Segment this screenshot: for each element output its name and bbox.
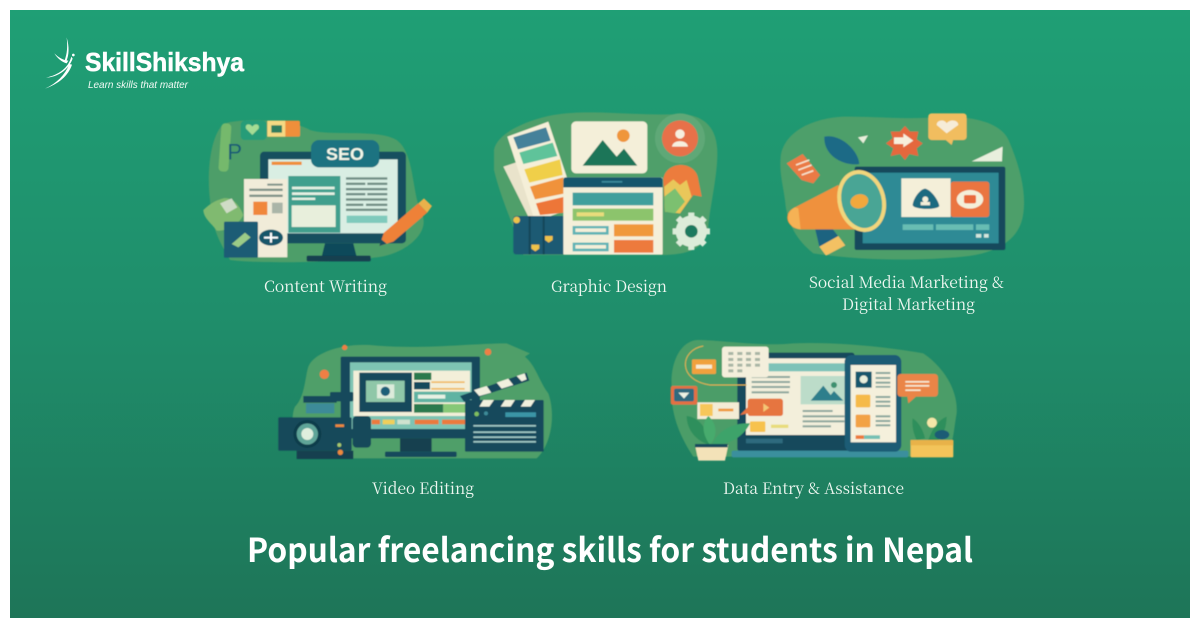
dark icon square <box>224 222 258 258</box>
title: Popular freelancing skills for students in Nepal <box>247 524 973 572</box>
profile badge <box>655 113 705 163</box>
window tag <box>267 121 300 137</box>
green blob <box>293 343 552 458</box>
logo: SkillShikshya <box>45 37 244 91</box>
illustration: data entry and assistance <box>671 340 957 461</box>
text lines <box>346 177 387 223</box>
map pin shape <box>663 165 702 213</box>
laptop <box>732 353 908 457</box>
orange dots <box>320 345 491 379</box>
stone <box>220 198 237 213</box>
dashed curve <box>685 346 747 385</box>
chat icon <box>671 386 697 405</box>
clapperboard <box>460 373 544 452</box>
pencil <box>379 198 432 246</box>
SEO pill <box>311 140 379 167</box>
label: social media marketing and digital marketing: Social Media Marketing & <box>809 270 1004 293</box>
tablet <box>855 167 1005 250</box>
note tag <box>787 154 820 183</box>
illustration: social media marketing <box>780 113 1024 260</box>
letter P: P <box>227 139 242 164</box>
monitor <box>341 357 480 457</box>
tablet <box>845 355 901 452</box>
illustration: content writing <box>203 120 432 262</box>
play tag <box>740 399 783 416</box>
document <box>244 179 287 257</box>
green blob <box>671 340 957 457</box>
green stick <box>218 123 232 172</box>
picture card <box>571 121 647 173</box>
small heart <box>858 135 868 143</box>
arrow badge <box>886 126 923 160</box>
folders <box>513 216 565 254</box>
brand name: SkillShikshya <box>85 47 244 77</box>
splash <box>203 198 243 231</box>
label: video editing: Video Editing <box>372 476 474 499</box>
green blob <box>209 120 424 262</box>
label: social media marketing and digital marketing: Digital Marketing <box>842 292 975 315</box>
camera <box>278 392 371 459</box>
potted plant left <box>687 416 750 461</box>
label: content writing: Content Writing <box>264 274 387 297</box>
tagline: Learn skills that matter <box>88 79 188 91</box>
label: data entry and assistance: Data Entry & Assistance <box>723 476 904 499</box>
yellow note <box>697 402 739 419</box>
browser window <box>563 177 663 255</box>
chart mark <box>972 147 1003 161</box>
SEO pill: SEO <box>326 144 364 164</box>
flower box right <box>911 417 953 457</box>
label: graphic design: Graphic Design <box>551 274 667 297</box>
illustration: video editing <box>278 343 552 459</box>
gear <box>673 213 710 250</box>
back swatch sheet <box>503 160 550 220</box>
monitor <box>260 152 406 261</box>
heart speech bubble <box>928 113 967 145</box>
green blob <box>780 117 1024 260</box>
calendar card <box>722 347 769 377</box>
colour swatch <box>507 122 577 222</box>
leaf <box>824 136 859 164</box>
orange tag <box>692 359 716 374</box>
heart tag <box>241 121 267 140</box>
green blob <box>494 112 717 255</box>
speech bubble <box>897 374 938 403</box>
illustration: graphic design <box>494 112 717 255</box>
center content panel <box>288 176 340 233</box>
label: social media marketing and digital marketing <box>809 270 1004 315</box>
icon: leaping figure <box>45 37 75 89</box>
megaphone <box>787 165 893 256</box>
